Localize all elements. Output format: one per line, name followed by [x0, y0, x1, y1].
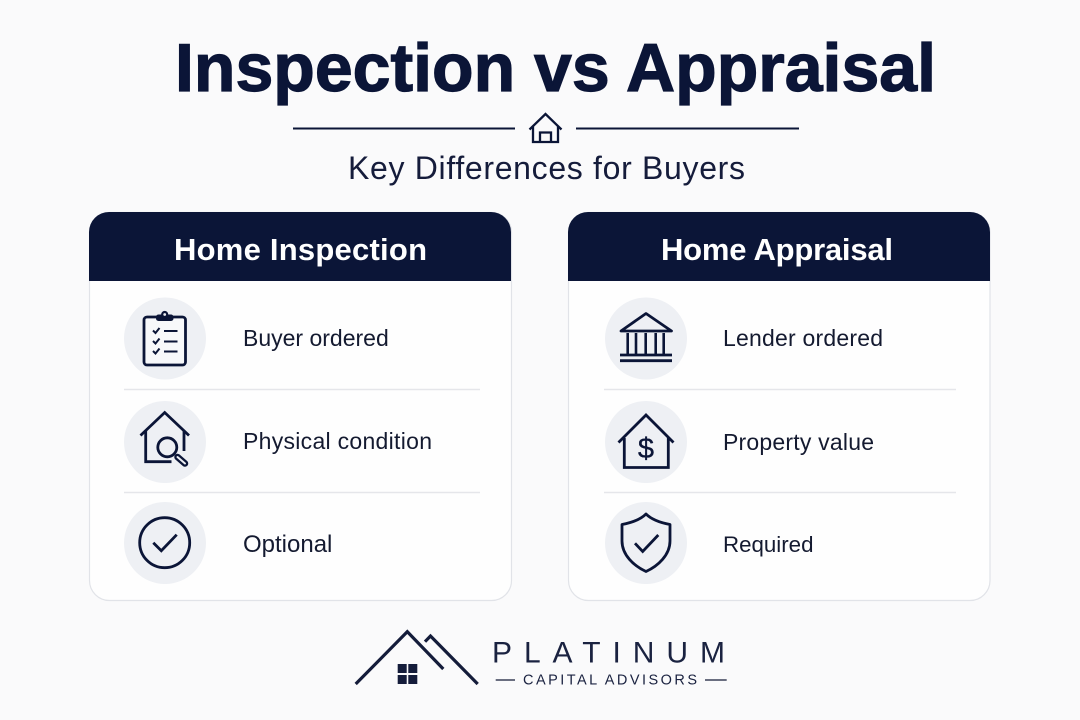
heading: home inspection: Home Inspection: [174, 232, 427, 267]
panel: home appraisal: [568, 212, 990, 600]
logo: platinum capital advisors: [356, 632, 727, 688]
label: optional: Optional: [243, 531, 332, 558]
icon: house with magnifier: [124, 401, 206, 483]
label: required: Required: [723, 532, 813, 557]
panel header: home appraisal: [568, 212, 990, 281]
label: lender ordered: Lender ordered: [723, 325, 883, 351]
label: physical condition: Physical condition: [243, 428, 432, 454]
icon: bank building: [605, 298, 687, 380]
subtitle: Key Differences for Buyers: [348, 150, 745, 186]
title: Inspection vs Appraisal: [175, 30, 936, 106]
title divider with house icon: [293, 114, 799, 142]
logo wordmark: PLATINUM: [492, 636, 725, 670]
logo tagline: CAPITAL ADVISORS: [523, 672, 697, 688]
heading: home appraisal: Home Appraisal: [661, 232, 893, 267]
icon: clipboard checklist: [124, 298, 206, 380]
label: property value: Property value: [723, 429, 874, 455]
icon: shield with check: [605, 502, 687, 584]
icon: house with dollar sign: $: [638, 433, 654, 465]
panel: home inspection: [89, 212, 512, 600]
icon: check circle: [124, 502, 206, 584]
logo icon: roofs and window: [356, 632, 478, 684]
icon: house with dollar sign: [605, 401, 687, 483]
label: buyer ordered: Buyer ordered: [243, 325, 389, 351]
panel header: home inspection: [89, 212, 511, 281]
